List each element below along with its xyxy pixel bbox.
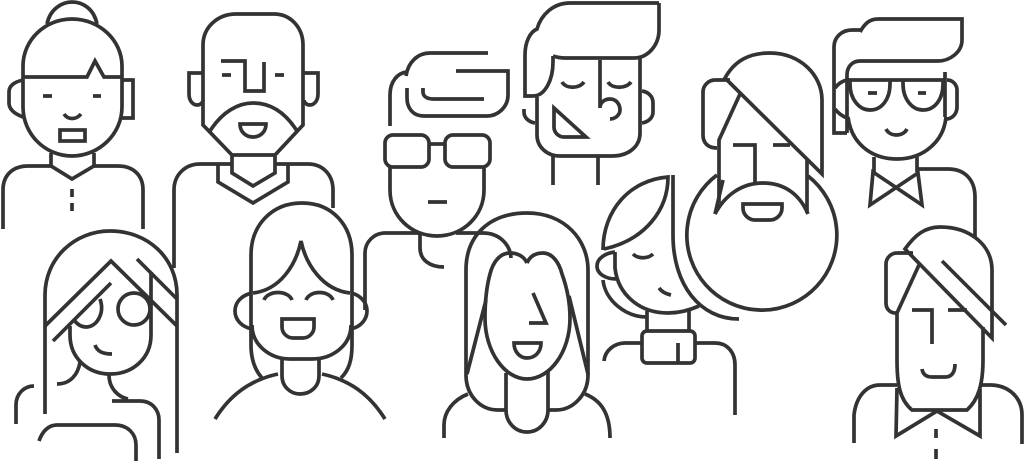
- person: woman with long straight hair: [444, 213, 610, 438]
- person: man with glasses and bow tie: [834, 19, 975, 238]
- person: man with swept fringe and collar: [854, 227, 1022, 459]
- person: smiling woman with bob hair: [215, 203, 385, 419]
- person: bald man with goatee: [174, 14, 333, 268]
- person: woman with hair bun: [3, 2, 143, 229]
- person: bearded man with side parting: [687, 53, 837, 310]
- person: woman in profile with turtleneck: [597, 175, 739, 415]
- person: man with dark glasses: [365, 53, 511, 310]
- person: man with quiff, side profile: [524, 3, 659, 185]
- person: woman with long hair and round glasses: [16, 231, 177, 461]
